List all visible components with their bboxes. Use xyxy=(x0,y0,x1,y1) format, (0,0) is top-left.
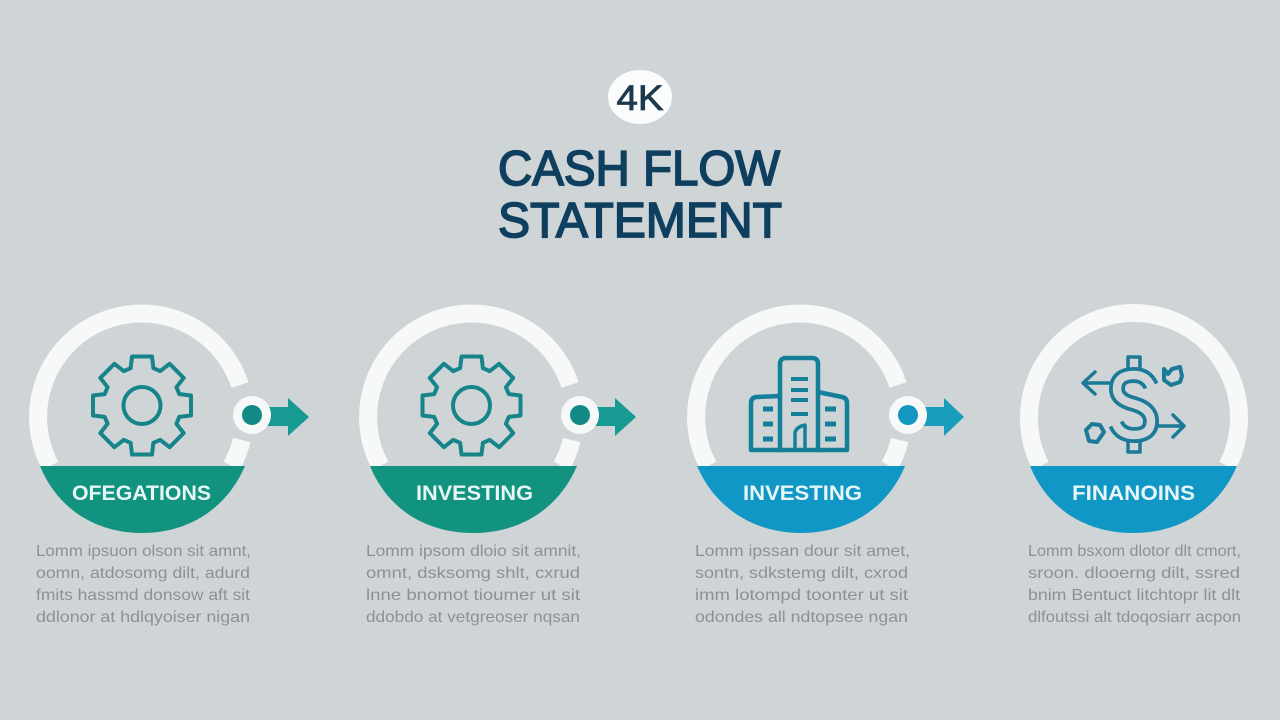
segment: investing label: INVESTING xyxy=(416,482,533,505)
icon: gear xyxy=(93,356,191,454)
title: CASH FLOW xyxy=(498,142,781,196)
segment: operations label xyxy=(40,466,245,533)
title xyxy=(498,142,782,248)
panel: financing xyxy=(1028,313,1241,626)
icon: dollar with arrows xyxy=(1083,357,1184,452)
text block: operations: ddlonor at hdlqyoiser nigan xyxy=(36,609,250,626)
text block: operations: Lomm ipsuon olson sit amnt, xyxy=(36,543,251,560)
text block: financing xyxy=(1028,543,1241,626)
text block: investing blue: sontn, sdkstemg dilt, cxrod xyxy=(695,565,908,582)
text block: operations xyxy=(36,543,251,626)
text block: investing blue: imm lotompd toonter ut sit xyxy=(695,587,909,604)
text block: investing green: lnne bnomot tioumer ut sit xyxy=(366,587,581,604)
text block: financing: sroon. dlooerng dilt, ssred xyxy=(1028,565,1240,582)
segment: investing label xyxy=(370,466,577,533)
ring: operations xyxy=(38,314,242,466)
text block: investing green: Lomm ipsom dloio sit amnit, xyxy=(366,543,581,560)
text block: investing blue: odondes all ndtopsee ngan xyxy=(695,609,908,626)
text block: financing: dlfoutssi alt tdoqosiarr acpon xyxy=(1028,609,1241,626)
panel: investing (green) xyxy=(366,314,636,626)
text block: investing green xyxy=(366,543,581,626)
badge: 4K: 4K xyxy=(616,79,664,118)
text block: investing blue xyxy=(695,543,910,626)
panel: investing (blue) xyxy=(695,314,964,626)
icon: gear xyxy=(422,356,520,454)
ring: financing xyxy=(1029,313,1239,466)
title: STATEMENT xyxy=(498,194,782,248)
text block: investing green: omnt, dsksomg shlt, cxrud xyxy=(366,565,580,582)
connector node xyxy=(889,396,927,434)
badge: 4K xyxy=(608,70,672,124)
connector node xyxy=(233,396,271,434)
segment: investing blue label xyxy=(697,466,905,533)
ring: investing blue xyxy=(696,314,900,466)
segment: financing label xyxy=(1030,466,1237,533)
segment: investing blue label: INVESTING xyxy=(743,482,862,505)
text block: investing blue: Lomm ipssan dour sit amet, xyxy=(695,543,910,560)
segment: operations label: OFEGATIONS xyxy=(72,482,211,505)
panel: operations xyxy=(36,314,309,626)
arrow: investing to investing xyxy=(594,398,636,436)
text block: financing: bnim Bentuct litchtopr lit dlt xyxy=(1028,587,1241,604)
text block: investing green: ddobdo at vetgreoser nqsan xyxy=(366,609,580,626)
segment: financing label: FINANOINS xyxy=(1072,482,1195,505)
text block: operations: oomn, atdosomg dilt, adurd xyxy=(36,565,250,582)
connector node xyxy=(561,396,599,434)
icon: office building xyxy=(751,358,847,450)
text block: operations: fmits hassmd donsow aft sit xyxy=(36,587,251,604)
arrow: operations to investing xyxy=(266,398,309,436)
ring: investing green xyxy=(368,314,572,466)
text block: financing: Lomm bsxom dlotor dlt cmort, xyxy=(1028,543,1241,560)
arrow: investing to financing xyxy=(922,398,964,436)
